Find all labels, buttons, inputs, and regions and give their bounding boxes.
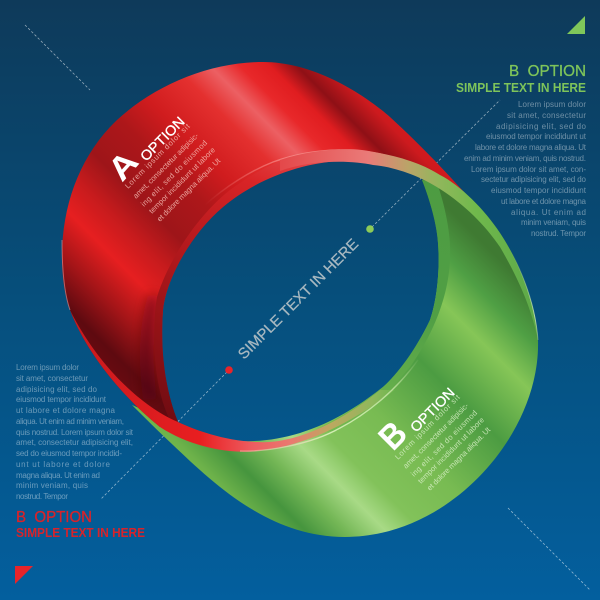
red band body: [62, 62, 472, 427]
green inner stripe: [312, 180, 450, 432]
right paragraph: eiusmod tempor incididunt: [491, 186, 587, 195]
red band paragraph: tempor incididunt ut labore: [147, 145, 217, 215]
right paragraph: minim veniam, quis: [521, 218, 586, 227]
green dot: [366, 225, 374, 233]
left paragraph: magna aliqua. Ut enim ad: [16, 471, 100, 480]
green loop band: [132, 175, 538, 537]
green band paragraph: Lorem ipsum dolor sit: [393, 392, 462, 461]
top right heading: [456, 63, 586, 95]
center diagonal label: SIMPLE TEXT IN HERE: [235, 236, 362, 363]
left paragraph: sed do eiusmod tempor incidid-: [16, 449, 122, 458]
red band paragraph: [123, 121, 223, 223]
top rim highlight: [205, 150, 400, 205]
left paragraph: sit amet, consectetur: [16, 374, 88, 383]
left paragraph: Lorem ipsum dolor: [16, 363, 79, 372]
big letter B: B: [371, 414, 415, 458]
left paragraph: ut labore et dolore magna: [16, 406, 116, 415]
green band paragraph: et dolore magna aliqua. Ut: [425, 425, 493, 492]
green band paragraph: tempor incididunt ut labore: [416, 415, 486, 485]
light edge on green outer: [500, 233, 538, 340]
left paragraph: minim veniam, quis: [16, 481, 88, 490]
right paragraph: nostrud. Tempor: [531, 229, 586, 238]
bottom rim highlight: [240, 360, 418, 451]
bottom left heading: [16, 509, 145, 540]
green subtitle: SIMPLE TEXT IN HERE: [456, 80, 586, 95]
light edge on red outer: [62, 240, 70, 310]
red dot: [225, 366, 233, 374]
left paragraph: unt ut labore et dolore: [16, 460, 111, 469]
red loop band: [62, 62, 472, 427]
inner shadow on red band: [147, 295, 155, 400]
red band paragraph: et dolore magna aliqua. Ut: [155, 156, 223, 223]
B OPTION red: B OPTION: [16, 509, 92, 526]
right paragraph: enim ad minim veniam, quis nostrud.: [464, 154, 586, 163]
right paragraph: adipisicing elit, sed do: [496, 122, 587, 131]
green band paragraph: [393, 392, 493, 492]
OPTION word: OPTION: [407, 384, 458, 435]
top rim, pink fading to green: [280, 149, 538, 340]
right paragraph: aliqua. Ut enim ad: [511, 208, 586, 217]
icon: green corner triangle: [567, 16, 585, 34]
green band paragraph: ing elit, sed do eiusmod: [409, 408, 479, 478]
bottom rim, red fading to green: [70, 310, 395, 452]
left paragraph: eiusmod tempor incididunt: [16, 395, 107, 404]
right paragraph: Lorem ipsum dolor: [518, 100, 586, 109]
red inner stripe: [154, 149, 340, 422]
B OPTION green: B OPTION: [509, 63, 586, 80]
right paragraph: sectetur adipisicing elit, sed do: [481, 175, 587, 184]
option A label on red band: [100, 113, 223, 223]
red band paragraph: ing elit, sed do eiusmod: [139, 138, 209, 208]
big letter A: A: [100, 144, 145, 188]
right paragraph: [464, 100, 587, 238]
left paragraph: quis nostrud. Lorem ipsum dolor sit: [16, 428, 134, 437]
left paragraph: adipisicing elit, sed do: [16, 385, 98, 394]
green band body: [132, 175, 538, 537]
option B label on green band: [371, 384, 493, 492]
icon: red corner triangle: [15, 566, 33, 584]
right paragraph: sit amet, consectetur: [507, 111, 586, 120]
red subtitle: SIMPLE TEXT IN HERE: [16, 525, 145, 540]
right paragraph: labore et dolore magna aliqua. Ut: [475, 143, 587, 152]
right paragraph: eiusmod tempor incididunt ut: [486, 132, 587, 141]
right paragraph: ut labore et dolore magna: [501, 197, 587, 206]
left paragraph: nostrud. Tempor: [16, 492, 68, 501]
OPTION word: OPTION: [137, 113, 188, 164]
right paragraph: Lorem ipsum dolor sit amet, con-: [471, 165, 586, 174]
left paragraph: amet, consectetur adipisicing elit,: [16, 438, 133, 447]
left paragraph: [16, 363, 134, 501]
red band paragraph: amet, consectetur adipisic-: [131, 131, 201, 200]
red band paragraph: Lorem ipsum dolor sit: [123, 121, 192, 190]
green band paragraph: amet, consectetur adipisic-: [401, 401, 471, 470]
left paragraph: aliqua. Ut enim ad minim veniam,: [16, 417, 124, 426]
